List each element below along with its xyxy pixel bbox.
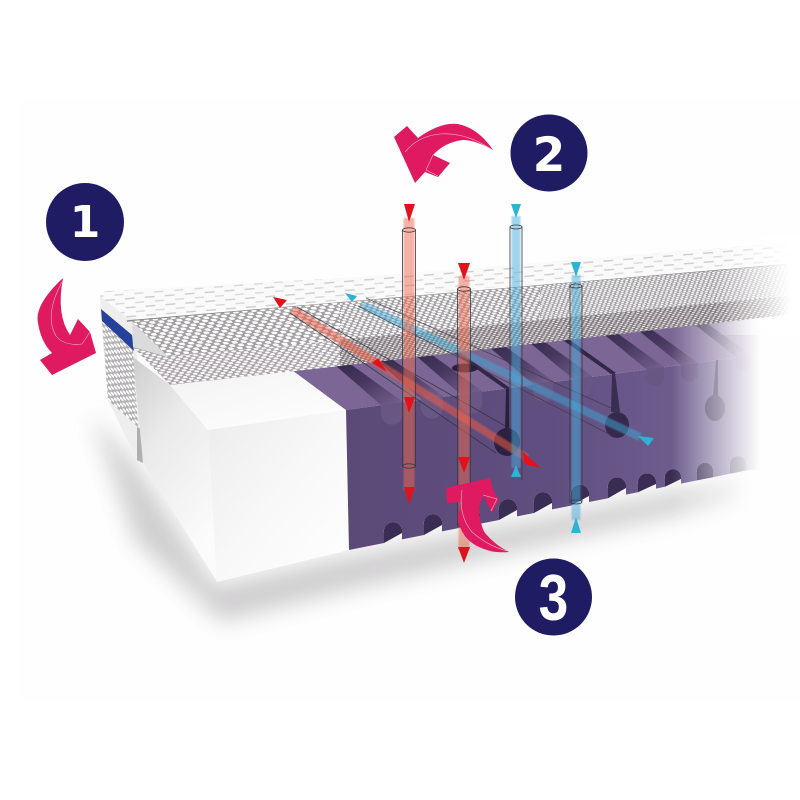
background panel xyxy=(20,100,800,700)
channel slits and holes xyxy=(452,360,725,456)
airflow: vertical red channel 1 xyxy=(402,204,416,504)
purple core with fade to the right xyxy=(293,320,755,550)
white foam block xyxy=(133,357,349,582)
badge 3: 3 xyxy=(539,561,568,634)
purple core front face xyxy=(346,353,770,550)
back edge layers xyxy=(100,291,143,463)
airflow: vertical red channel 2 xyxy=(458,263,470,563)
upper mesh layer xyxy=(132,264,795,357)
pink arrow 2 xyxy=(394,124,493,183)
purple core top surface xyxy=(293,320,755,410)
top cover sheet xyxy=(100,242,795,321)
airflow: vertical blue channel 1 xyxy=(510,204,522,480)
notch interior shading xyxy=(384,456,746,543)
badge 1: 1 xyxy=(70,197,100,248)
badge 3 xyxy=(515,558,592,636)
airflow: vertical blue channel 2 xyxy=(570,262,582,533)
mattress ground shadow xyxy=(92,415,745,622)
badge 2 xyxy=(510,114,588,192)
rib notches on front face xyxy=(381,355,751,425)
mattress illustration xyxy=(100,235,800,582)
pink arrow 3 xyxy=(446,478,509,552)
badge 1 xyxy=(46,183,124,261)
lower mesh layer xyxy=(132,290,795,385)
rib grooves xyxy=(336,324,735,405)
fade on fabric layers xyxy=(715,235,800,335)
pink arrow 1 xyxy=(38,278,96,375)
airflow: diagonal red channel xyxy=(273,297,541,468)
badge 2: 2 xyxy=(533,128,565,183)
airflow: diagonal blue channel xyxy=(345,293,654,446)
